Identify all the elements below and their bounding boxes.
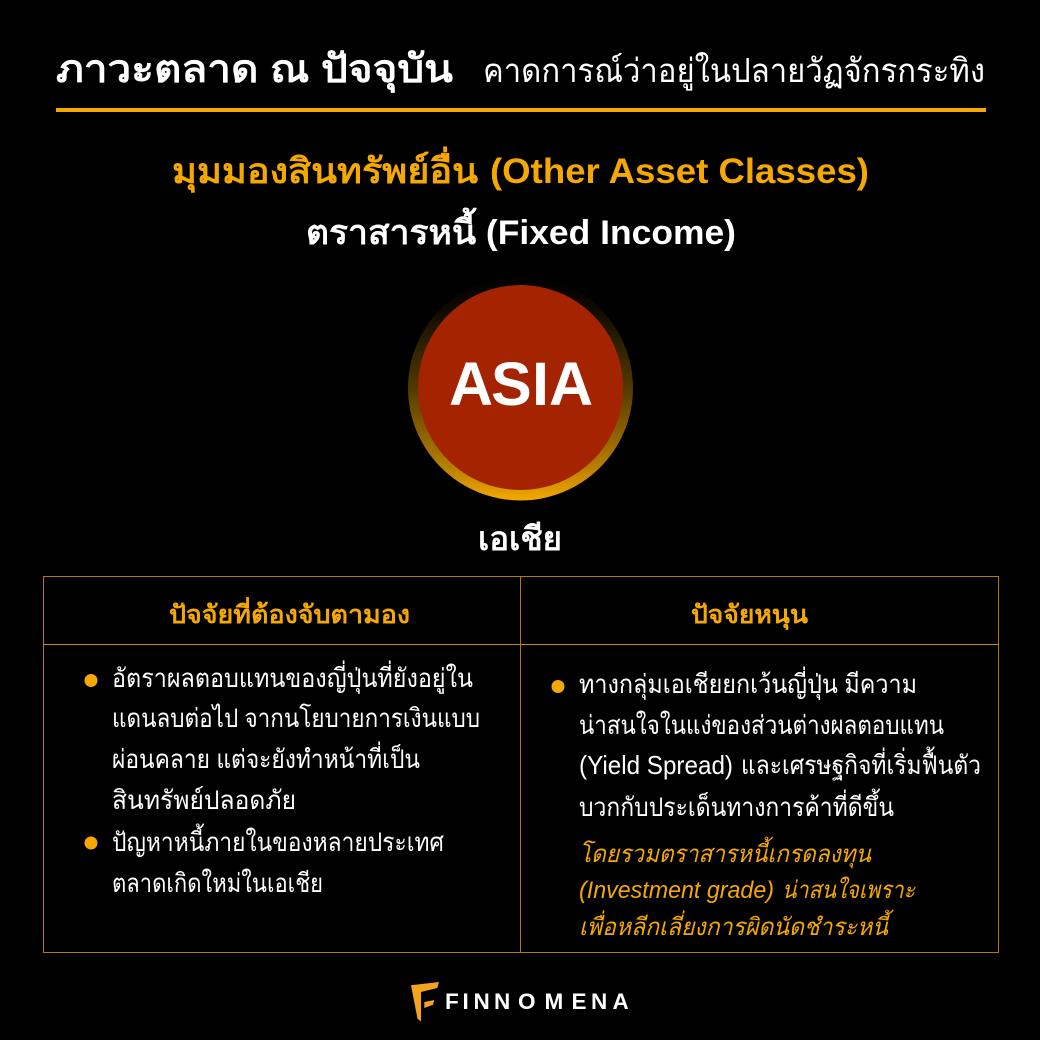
panel: factors to watch: ปัญหาหนี้ภายในของหลายประเทศ [112,823,444,857]
panel: supporting factors: ทางกลุ่มเอเชียยกเว้นญี่ปุ่น มีความ [579,666,917,700]
panel: supporting factors: น่าสนใจเพราะ [782,876,916,904]
logo: finnomena: FINNOMENA [445,989,629,1014]
title: คาดการณ์ว่าอยู่ในปลายวัฏจักรกระทิง [483,52,985,91]
logo: finnomena [411,982,629,1022]
badge: asia circle [408,276,633,500]
panel: factors to watch: สินทรัพย์ปลอดภัย [112,785,296,815]
subheading: fixed income: ตราสารหนี้ (Fixed Income) [306,207,736,252]
column header: supporting factors: ปัจจัยหนุน [691,601,808,631]
panel: factors to watch: ผ่อนคลาย แต่จะยังทำหน้าที่เป็น [112,741,420,774]
heading: other asset classes: มุมมองสินทรัพย์อื่น [172,146,478,193]
panel: supporting factors: และเศรษฐกิจที่เริ่มฟื้นตัว [741,746,981,781]
panel: factors to watch: อัตราผลตอบแทนของญี่ปุ่นที่ยังอยู่ใน [112,660,473,694]
panel: factors to watch: แดนลบต่อไป จากนโยบายการเงินแบบ [112,703,480,733]
column header: factors to watch: ปัจจัยที่ต้องจับตามอง [169,597,410,629]
heading: other asset classes [172,146,869,193]
title: ภาวะตลาด ณ ปัจจุบัน [56,48,453,93]
panel: supporting factors: โดยรวมตราสารหนี้เกรดลงทุน [579,836,872,869]
panel: factors to watch: ตลาดเกิดใหม่ในเอเชีย [112,868,323,898]
title [56,48,985,93]
table frame [43,576,999,953]
panel: supporting factors: น่าสนใจในแง่ของส่วนต่างผลตอบแทน [579,710,944,740]
panel: supporting factors: (Investment grade) [579,877,774,904]
badge: asia circle: ASIA [449,350,593,418]
panel: supporting factors: เพื่อหลีกเลี่ยงการผิดนัดชำระหนี้ [579,909,895,941]
region label: เอเชีย [478,520,562,557]
panel: supporting factors [552,666,981,941]
heading: other asset classes: (Other Asset Classes) [490,152,869,191]
title underline [56,108,986,112]
panel: supporting factors: บวกกับประเด็นทางการค้าที่ดีขึ้น [579,788,894,822]
panel: supporting factors: (Yield Spread) [579,750,733,780]
panel: factors to watch [84,660,480,898]
